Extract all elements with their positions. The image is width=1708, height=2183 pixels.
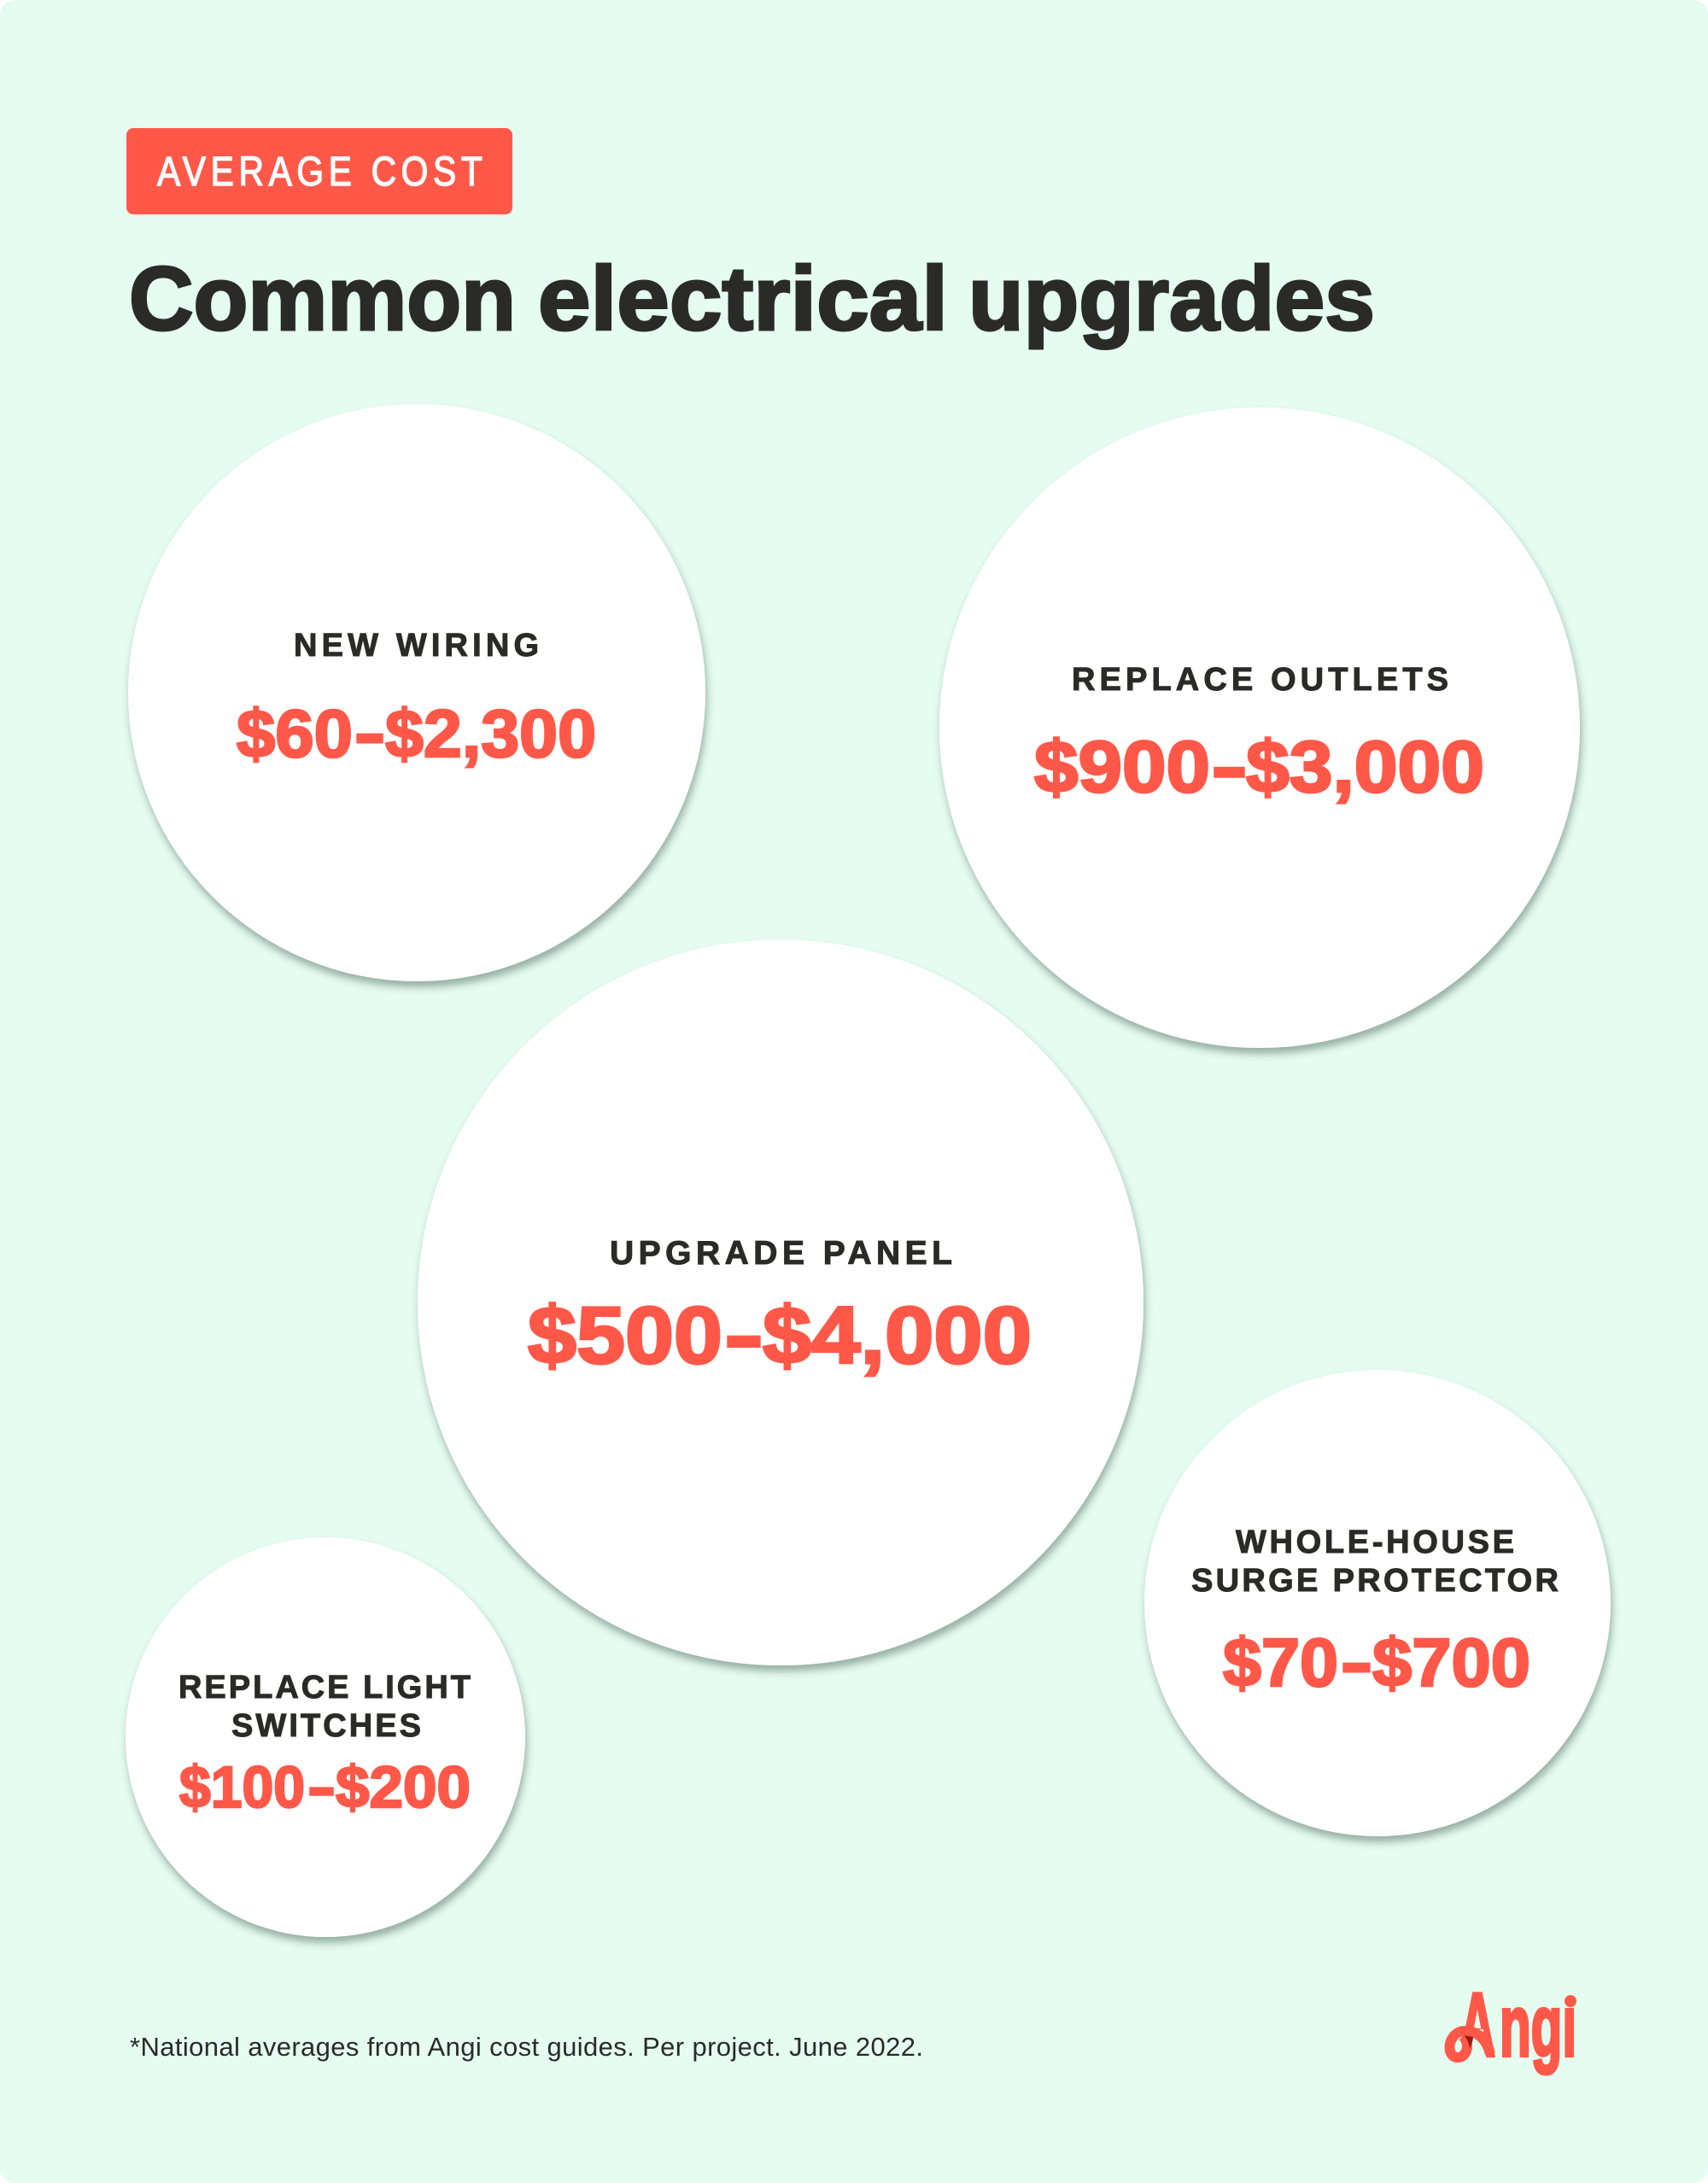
panel: whole-house surge protector: SURGE PROTECTOR bbox=[1191, 1563, 1559, 1599]
panel: whole-house surge protector: – bbox=[1342, 1624, 1371, 1700]
badge: average cost bbox=[126, 128, 512, 214]
panel: replace outlets bbox=[939, 407, 1580, 1048]
panel: upgrade panel: $500 bbox=[528, 1290, 722, 1381]
icon: Angi logo bbox=[1445, 1992, 1576, 2075]
panel: replace outlets: – bbox=[1214, 727, 1245, 808]
footnote: *National averages from Angi cost guides. Per project. June 2022. bbox=[130, 2032, 923, 2062]
icon: Angi logo: ngi bbox=[1500, 1977, 1576, 2075]
title: electrical bbox=[538, 249, 948, 349]
panel: replace light switches: SWITCHES bbox=[231, 1708, 421, 1744]
title: upgrades bbox=[968, 249, 1375, 349]
icon: Angi logo: A bbox=[1459, 1975, 1495, 2075]
panel: new wiring bbox=[128, 404, 705, 981]
panel: replace outlets: REPLACE OUTLETS bbox=[1072, 662, 1448, 698]
panel: upgrade panel: UPGRADE PANEL bbox=[610, 1235, 952, 1272]
panel: whole-house surge protector: $70 bbox=[1223, 1624, 1338, 1700]
panel: new wiring: $60 bbox=[237, 695, 353, 771]
title: Common bbox=[129, 249, 516, 349]
panel: upgrade panel: $4,000 bbox=[763, 1290, 1032, 1381]
panel: upgrade panel: – bbox=[727, 1290, 761, 1381]
panel: new wiring: NEW WIRING bbox=[294, 628, 539, 664]
panel: replace light switches: REPLACE LIGHT bbox=[178, 1670, 471, 1706]
panel: replace outlets: $3,000 bbox=[1246, 727, 1484, 808]
panel: whole-house surge protector: WHOLE-HOUSE bbox=[1236, 1525, 1514, 1560]
panel: whole-house surge protector: $700 bbox=[1372, 1624, 1530, 1700]
panel: replace light switches: $100 bbox=[179, 1754, 305, 1820]
panel: replace outlets: $900 bbox=[1034, 727, 1210, 808]
panel: upgrade panel bbox=[418, 939, 1144, 1665]
panel: new wiring: $2,300 bbox=[385, 695, 596, 771]
badge: average cost: AVERAGE COST bbox=[157, 149, 483, 195]
panel: whole-house surge protector bbox=[1144, 1370, 1611, 1836]
panel: replace light switches: – bbox=[309, 1754, 334, 1820]
panel: new wiring: – bbox=[356, 695, 383, 771]
panel: replace light switches: $200 bbox=[336, 1754, 471, 1820]
panel: replace light switches bbox=[126, 1537, 525, 1937]
